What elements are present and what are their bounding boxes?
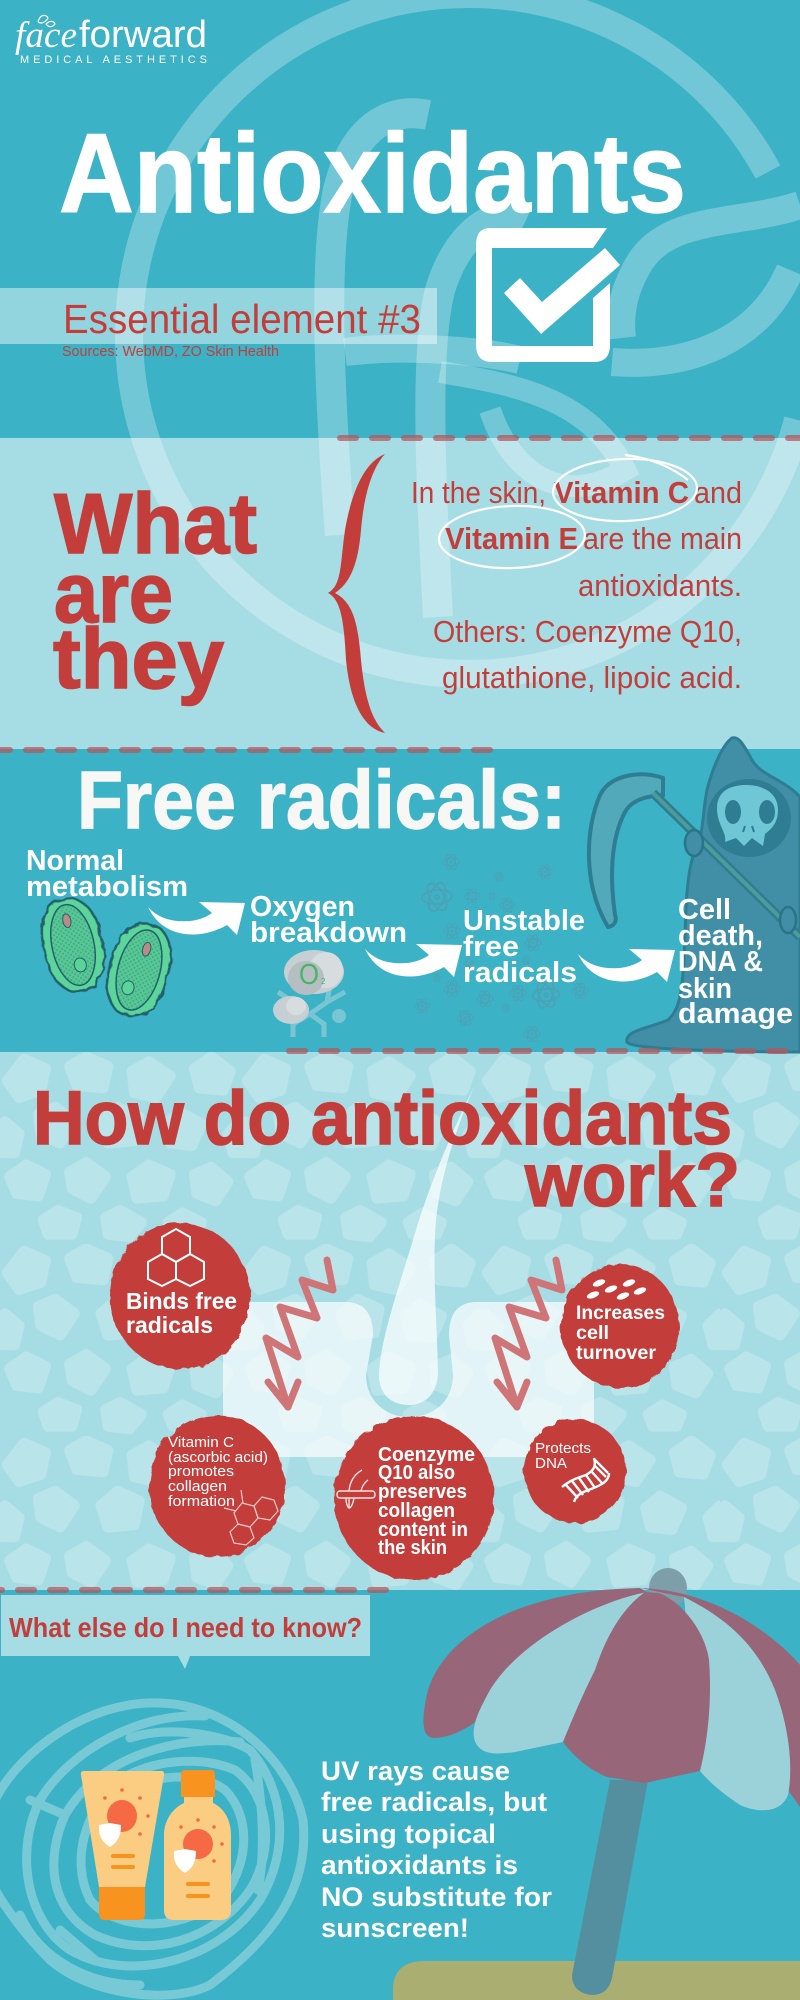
callout: vitamin C: Vitamin C — [168, 1434, 234, 1451]
panel: how do antioxidants work background — [0, 1052, 800, 1590]
callout: binds free radicals: Binds free — [126, 1288, 237, 1314]
text block: sunscreen warning: free radicals, but — [321, 1787, 547, 1817]
illustration: scribble — [0, 1703, 304, 1995]
text block: sunscreen warning: sunscreen! — [321, 1913, 469, 1943]
icon: oxygen molecule — [273, 950, 346, 1037]
heading: what are they: they — [53, 612, 224, 707]
icon: oxygen molecule: 2 — [321, 977, 326, 986]
text block: what are they — [411, 475, 742, 695]
step: cell death: death, — [678, 920, 763, 952]
panel: free radicals background — [0, 749, 800, 1052]
text block: what are they: antioxidants. — [578, 568, 742, 603]
heading: free radicals: Free radicals: — [77, 755, 566, 846]
step: cell death — [678, 894, 793, 1030]
icon: cell two — [99, 917, 179, 1023]
text block: what are they: Vitamin E — [445, 521, 578, 556]
heading: what are they — [53, 477, 257, 707]
step: unstable free radicals: radicals — [463, 957, 577, 989]
callout: protects DNA: Protects — [535, 1440, 591, 1457]
icon: sunscreen tube — [81, 1771, 164, 1920]
skin cell pattern — [0, 1052, 800, 1590]
text block: sunscreen warning: antioxidants is — [321, 1850, 518, 1880]
callout: coenzyme Q10: Coenzyme — [378, 1444, 475, 1466]
icon: sunscreen bottle — [164, 1770, 231, 1920]
heading: how do antioxidants work: How do antioxidants — [33, 1076, 732, 1161]
illustration: sand — [393, 1961, 800, 2000]
text block: what are they: and — [694, 475, 742, 510]
arrow one — [148, 902, 245, 935]
step: oxygen breakdown: Oxygen — [250, 891, 355, 923]
text block: what are they: Vitamin C — [554, 475, 689, 510]
step: cell death: damage — [678, 998, 793, 1030]
icon: cell one — [35, 893, 111, 997]
callout: binds free radicals — [110, 1223, 250, 1369]
heading: what are they: What — [54, 477, 257, 572]
highlight circles — [438, 455, 698, 571]
text block: what are they: In the skin, — [411, 475, 546, 510]
callout: increases cell turnover: cell — [576, 1323, 609, 1344]
step: oxygen breakdown — [250, 891, 407, 949]
step: normal metabolism — [26, 845, 188, 903]
logo: Face Forward: MEDICAL AESTHETICS — [20, 54, 207, 66]
heading: how do antioxidants work — [33, 1076, 740, 1223]
illustration: grim reaper — [589, 738, 800, 1052]
logo: Face Forward: face — [15, 15, 77, 56]
callout: vitamin C: formation — [168, 1493, 235, 1510]
illustration: beach umbrella — [423, 1568, 800, 1995]
text block: what are they: Others: Coenzyme Q10, — [433, 614, 742, 649]
brace — [328, 454, 385, 733]
step: normal metabolism: metabolism — [26, 871, 188, 903]
callout: protects DNA: DNA — [535, 1455, 567, 1472]
icon: checkbox — [476, 228, 620, 362]
callout: protects DNA — [524, 1419, 626, 1523]
arrow three — [578, 949, 675, 982]
text block: sunscreen warning: using topical — [321, 1819, 496, 1849]
sources: Sources: WebMD, ZO Skin Health — [62, 343, 279, 360]
text block: sunscreen warning: UV rays cause — [321, 1756, 510, 1786]
arrow: squiggle right — [495, 1260, 562, 1407]
callout: increases cell turnover: Increases — [576, 1303, 665, 1324]
callout: coenzyme Q10: preserves — [378, 1481, 467, 1503]
step: normal metabolism: Normal — [26, 845, 124, 877]
panel: what else background — [0, 1590, 800, 2000]
arrow: squiggle left — [266, 1260, 333, 1407]
step: cell death: DNA & — [678, 946, 763, 978]
step: unstable free radicals — [463, 905, 585, 989]
callout: coenzyme Q10: content in — [378, 1519, 468, 1541]
callout: vitamin C: collagen — [168, 1478, 227, 1495]
callout: coenzyme Q10: Q10 also — [378, 1462, 455, 1484]
title: Antioxidants — [59, 111, 686, 236]
step: oxygen breakdown: breakdown — [250, 917, 407, 949]
illustration: skin block with follicle — [223, 1087, 594, 1457]
callout: binds free radicals: radicals — [126, 1312, 213, 1338]
subtitle: Essential element #3 — [63, 296, 421, 342]
heading: what are they: are — [54, 546, 173, 641]
callout: coenzyme Q10: collagen — [378, 1500, 455, 1522]
icon: oxygen molecule: O — [299, 959, 319, 991]
subtitle band — [0, 288, 437, 344]
callout: increases cell turnover — [561, 1264, 679, 1388]
callout: increases cell turnover: turnover — [576, 1343, 657, 1364]
callout: coenzyme Q10 — [334, 1416, 494, 1580]
watermark logo — [129, 0, 800, 674]
icon: free radical atoms — [414, 853, 589, 1043]
heading: how do antioxidants work: work? — [524, 1138, 740, 1223]
logo: Face Forward: forward — [79, 14, 207, 56]
arrow two — [365, 944, 462, 977]
callout: coenzyme Q10: the skin — [378, 1537, 447, 1559]
step: cell death: Cell — [678, 894, 731, 926]
step: unstable free radicals: free — [463, 931, 519, 963]
callout: vitamin C: (ascorbic acid) — [168, 1449, 268, 1466]
text block: what are they: are the main — [583, 521, 742, 556]
callout: what else do I need to know: What else do I need to know? — [9, 1612, 362, 1643]
text block: what are they: glutathione, lipoic acid. — [442, 660, 742, 695]
text block: sunscreen warning: NO substitute for — [321, 1882, 553, 1912]
step: cell death: skin — [678, 973, 732, 1005]
callout: what else do I need to know — [1, 1595, 370, 1669]
logo: Face Forward — [15, 14, 207, 66]
step: unstable free radicals: Unstable — [463, 905, 585, 937]
panel: what are they background — [0, 438, 800, 749]
text block: sunscreen warning — [321, 1756, 553, 1943]
callout: vitamin C: promotes — [168, 1463, 234, 1480]
callout: vitamin C — [149, 1415, 285, 1557]
